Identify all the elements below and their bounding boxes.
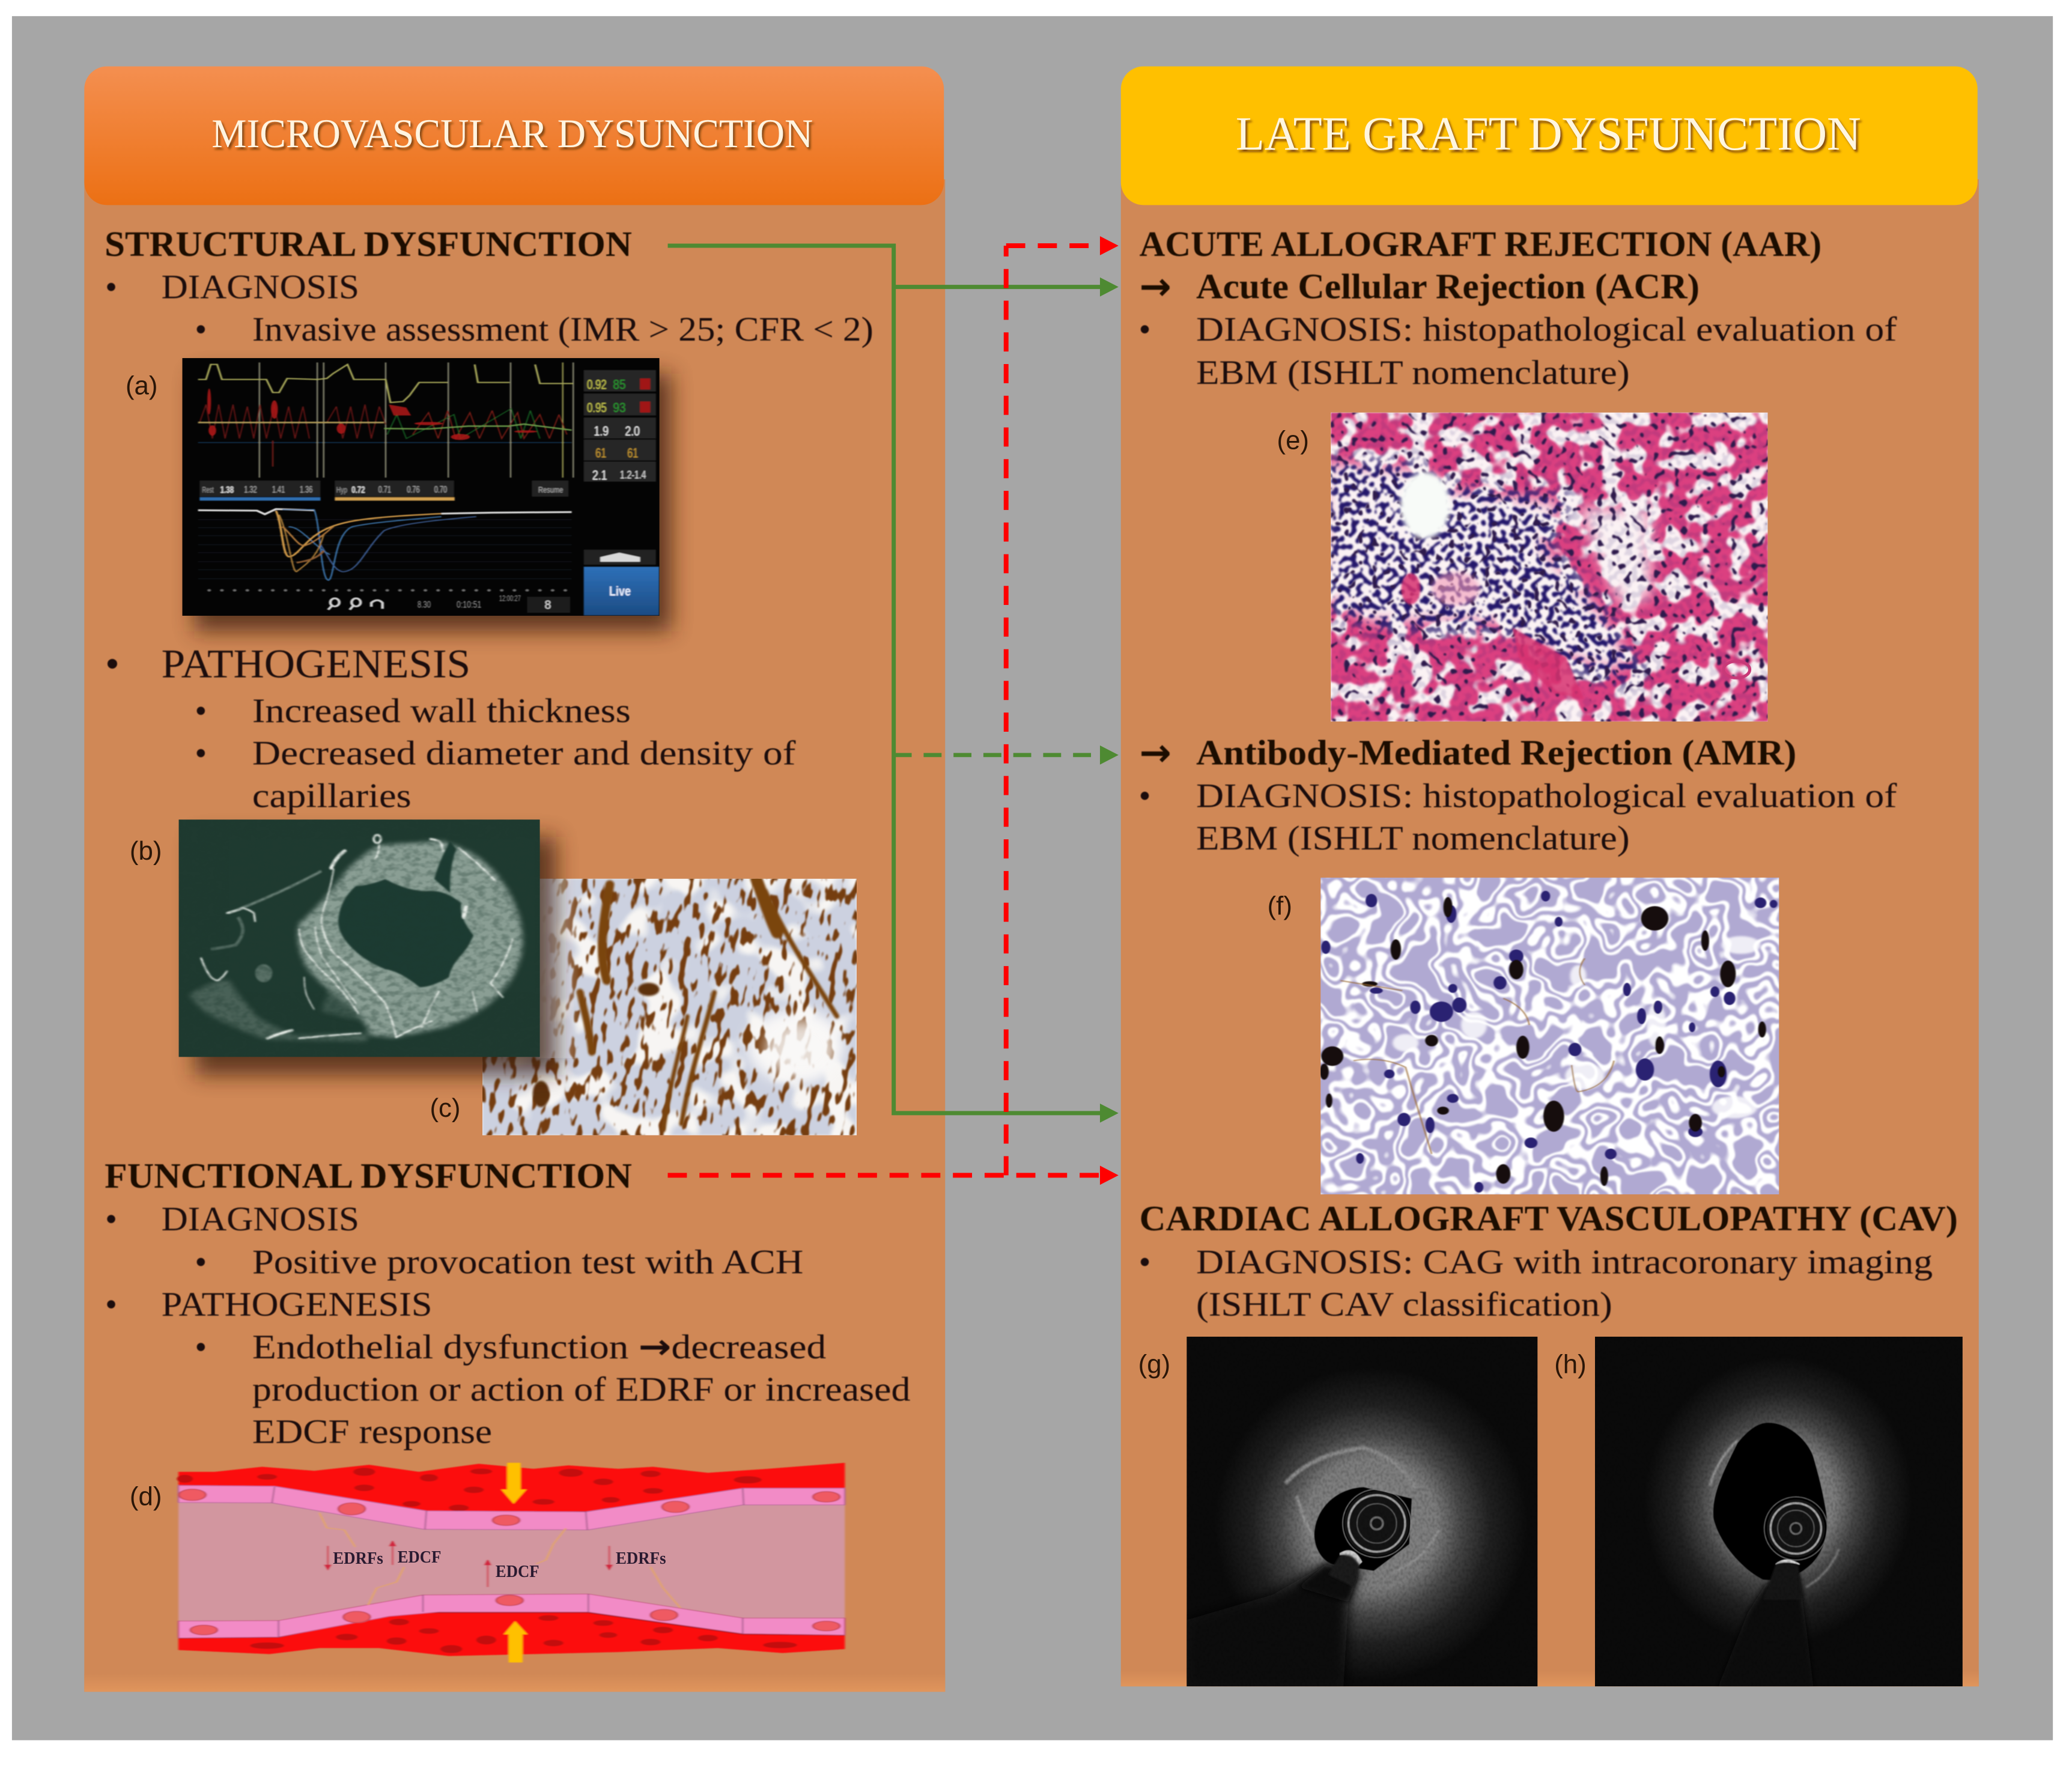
image (a): invasive physiology console: 2.1: [592, 468, 607, 483]
image (a): invasive physiology console: [183, 358, 671, 631]
diagram (d): vasoconstricted vessel: EDRFs: [333, 1549, 383, 1568]
text block: functional dysfunction: •: [105, 1200, 117, 1238]
panel body right: [1121, 180, 1979, 1686]
image (a): invasive physiology console: 1.2-1.4: [620, 469, 646, 481]
text block: structural dysfunction heading and diagnosis: •: [195, 311, 207, 348]
image (a): invasive physiology console: 12:00:27: [499, 594, 521, 603]
panel: late graft dysfunction: [1121, 66, 1979, 1688]
image (a): invasive physiology console: 85: [613, 377, 626, 392]
label (e): (e): [1277, 425, 1309, 455]
text block: functional dysfunction: •: [195, 1244, 207, 1281]
text block: functional dysfunction: DIAGNOSIS: [162, 1200, 359, 1238]
arrows: functional dysfunction red dashed connectors: [668, 236, 1119, 1185]
diagram (d): vasoconstricted vessel: EDRFs: [616, 1549, 666, 1568]
text block: functional dysfunction: PATHOGENESIS: [162, 1286, 432, 1323]
text block: structural pathogenesis: •: [195, 735, 207, 773]
image (e): H&E micrograph of cellular rejection: [1331, 413, 1768, 721]
text block: functional dysfunction: Positive provocation test with ACH: [252, 1244, 803, 1281]
panel body left: [84, 180, 945, 1692]
image (a): invasive physiology console: Hyp: [336, 485, 347, 494]
text block: acute allograft rejection and ACR: DIAGNOSIS: histopathological evaluation of: [1196, 311, 1897, 348]
image (a): invasive physiology console: 0.95: [587, 401, 607, 415]
image (a): invasive physiology console: Live: [609, 585, 631, 599]
image (a): invasive physiology console: 1.38: [220, 485, 234, 495]
image (a): invasive physiology console: 1.32: [244, 485, 257, 495]
image (a): invasive physiology console: 0.70: [434, 485, 447, 495]
text block: functional dysfunction: [105, 1156, 911, 1451]
text block: cardiac allograft vasculopathy: CARDIAC ALLOGRAFT VASCULOPATHY (CAV): [1140, 1198, 1958, 1238]
text block: structural dysfunction heading and diagnosis: Invasive assessment (IMR > 25; CFR < 2): [252, 311, 873, 348]
image (a): invasive physiology console: 61: [595, 446, 606, 461]
text block: cardiac allograft vasculopathy: DIAGNOSIS: CAG with intracoronary imaging: [1196, 1244, 1933, 1281]
label (f): (f): [1268, 891, 1292, 920]
text block: structural pathogenesis: Increased wall thickness: [252, 692, 631, 730]
heading: late graft dysfunction: LATE GRAFT DYSFUNCTION: [1236, 108, 1861, 160]
label (h): (h): [1554, 1350, 1587, 1379]
text block: acute allograft rejection and ACR: •: [1139, 311, 1151, 348]
text block: structural pathogenesis: •: [195, 692, 207, 730]
heading: microvascular dysfunction: [84, 66, 944, 205]
text block: structural dysfunction heading and diagnosis: [105, 224, 873, 348]
diagram (d): vasoconstricted vessel: EDCF: [496, 1562, 539, 1581]
image (a): invasive physiology console: 8.30: [418, 600, 431, 610]
text block: acute allograft rejection and ACR: →: [1140, 265, 1171, 309]
image (f): C4d immunostained micrograph: [1320, 878, 1779, 1194]
image (a): invasive physiology console: 0.92: [587, 377, 607, 392]
text block: antibody-mediated rejection: DIAGNOSIS: histopathological evaluation of: [1196, 777, 1897, 815]
text block: functional dysfunction: production or action of EDRF or increased: [252, 1371, 911, 1409]
image (a): invasive physiology console: Rest: [202, 485, 214, 494]
text block: antibody-mediated rejection: [1139, 731, 1897, 857]
panel: microvascular dysfunction: [84, 66, 958, 1692]
text block: structural dysfunction heading and diagnosis: •: [105, 269, 117, 306]
text block: acute allograft rejection and ACR: EBM (ISHLT nomenclature): [1196, 354, 1630, 392]
text block: structural dysfunction heading and diagnosis: DIAGNOSIS: [162, 269, 359, 306]
label (g): (g): [1138, 1350, 1170, 1379]
text block: functional dysfunction: Endothelial dysfunction →decreased: [252, 1327, 826, 1367]
label (d): (d): [130, 1482, 162, 1511]
text block: cardiac allograft vasculopathy: •: [1139, 1244, 1151, 1281]
image (a): invasive physiology console: 1.41: [272, 485, 285, 495]
text block: antibody-mediated rejection: →: [1140, 731, 1171, 776]
image (a): invasive physiology console: 93: [613, 401, 626, 415]
text block: functional dysfunction: FUNCTIONAL DYSFUNCTION: [105, 1156, 632, 1195]
image (a): invasive physiology console: 0.72: [351, 485, 365, 495]
label (c): (c): [430, 1093, 461, 1123]
image (a): invasive physiology console: 1.36: [300, 485, 312, 495]
image (a): invasive physiology console: 0:10:51: [457, 600, 481, 610]
heading: microvascular dysfunction: MICROVASCULAR DYSUNCTION: [211, 111, 813, 156]
text block: cardiac allograft vasculopathy: [1139, 1198, 1958, 1323]
text block: structural pathogenesis: PATHOGENESIS: [162, 641, 470, 686]
text block: structural pathogenesis: capillaries: [252, 777, 412, 815]
image (a): invasive physiology console: 8: [545, 598, 551, 612]
image (a): invasive physiology console: 2.0: [625, 424, 640, 439]
text block: structural pathogenesis: [105, 641, 796, 815]
diagram (d): vasoconstricted vessel: EDCF: [398, 1548, 441, 1567]
text block: acute allograft rejection and ACR: ACUTE ALLOGRAFT REJECTION (AAR): [1140, 224, 1821, 264]
text block: cardiac allograft vasculopathy: (ISHLT CAV classification): [1196, 1286, 1612, 1323]
text block: antibody-mediated rejection: Antibody-Mediated Rejection (AMR): [1196, 733, 1796, 773]
label (b): (b): [130, 836, 162, 866]
image (h): OCT cross-section with larger lumen: [1595, 1337, 1963, 1688]
text block: acute allograft rejection and ACR: [1139, 224, 1897, 392]
image (a): invasive physiology console: Resume: [538, 485, 563, 494]
image (a): invasive physiology console: 61: [627, 446, 638, 461]
image (g): OCT cross-section with reduced lumen: [1186, 1337, 1537, 1688]
text block: structural pathogenesis: •: [105, 641, 120, 686]
diagram (d): vasoconstricted vessel: [177, 1463, 845, 1662]
text block: antibody-mediated rejection: •: [1139, 777, 1151, 815]
image (a): invasive physiology console: 0.71: [378, 485, 391, 495]
arrows: structural dysfunction green connectors: [668, 246, 1119, 1123]
text block: structural dysfunction heading and diagnosis: STRUCTURAL DYSFUNCTION: [105, 224, 632, 264]
image (b): post-mortem coronary angiogram: [178, 819, 556, 1075]
image (a): invasive physiology console: 1.9: [594, 424, 609, 439]
text block: functional dysfunction: •: [195, 1328, 207, 1366]
text block: acute allograft rejection and ACR: Acute Cellular Rejection (ACR): [1196, 267, 1700, 306]
label (a): (a): [126, 371, 157, 401]
image (c): immunostained myocardium: [482, 878, 857, 1135]
text block: functional dysfunction: EDCF response: [252, 1413, 492, 1451]
text block: structural pathogenesis: Decreased diameter and density of: [252, 735, 796, 773]
heading: late graft dysfunction: [1121, 66, 1978, 205]
image (a): invasive physiology console: 0.76: [407, 485, 420, 495]
text block: functional dysfunction: •: [105, 1286, 117, 1323]
text block: antibody-mediated rejection: EBM (ISHLT nomenclature): [1196, 819, 1630, 857]
